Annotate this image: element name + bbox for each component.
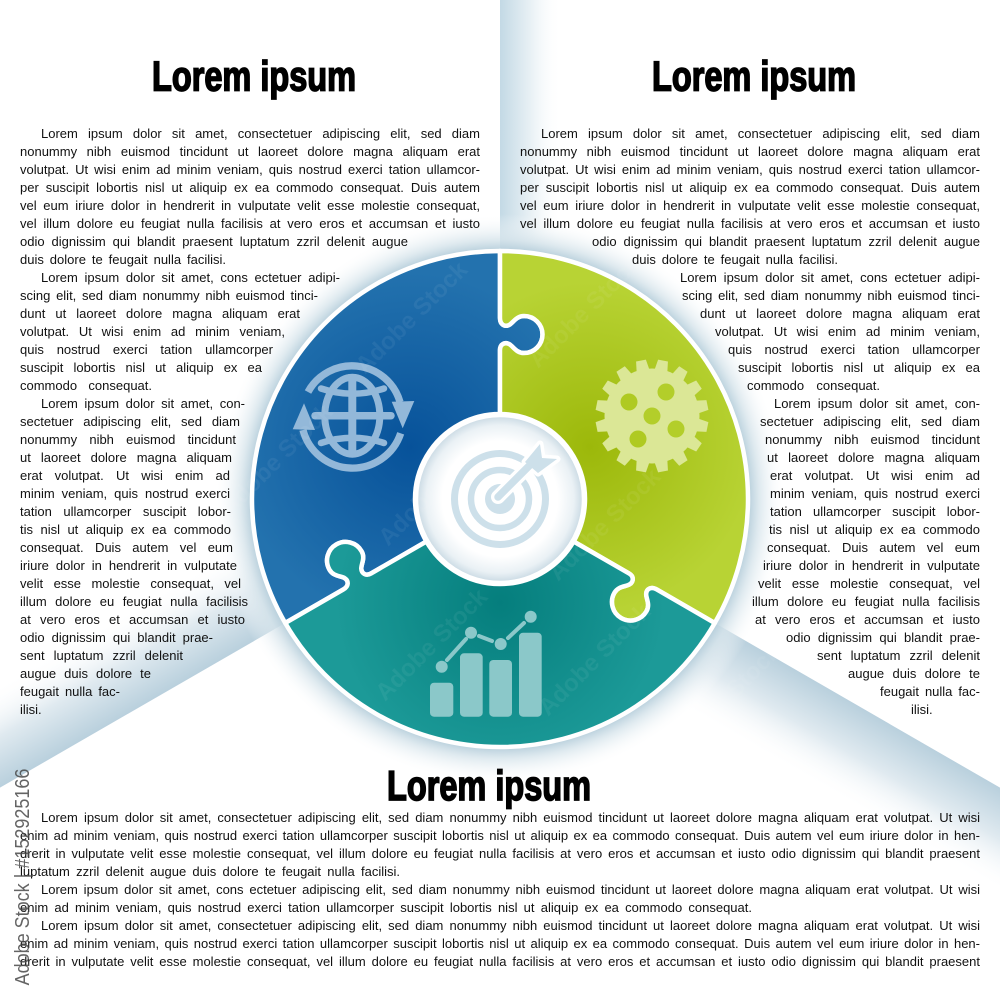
watermark text: Adobe Stock bbox=[373, 428, 497, 551]
text block: left column: commodo consequat. bbox=[20, 378, 152, 393]
text block: bottom: enim ad minim veniam, quis nostrud exerci tation ullamcorper suscipit lobortis nisl ut aliquip ex ea commodo consequat. Duis autem vel eum iriure dolor in hen- bbox=[20, 936, 980, 951]
text block: left column: quis nostrud exerci tation ullamcorper bbox=[20, 342, 273, 357]
text block: right column: suscipit lobortis nisl ut aliquip ex ea bbox=[738, 360, 980, 375]
circle glow bbox=[215, 214, 785, 784]
text block: left column: ut laoreet dolore magna aliquam bbox=[20, 450, 232, 465]
text block: right column: odio dignissim qui blandit praesent luptatum zzril delenit augue bbox=[592, 234, 980, 249]
watermark text: Adobe Stock bbox=[533, 598, 657, 721]
text block: right column: duis dolore te feugait nulla facilisi. bbox=[632, 252, 838, 267]
text block: left column: ilisi. bbox=[20, 702, 42, 717]
text block: left column: Lorem ipsum dolor sit amet, con- bbox=[41, 396, 245, 411]
text block: right column: nonummy nibh euismod tincidunt bbox=[765, 432, 980, 447]
watermark text: Adobe Stock bbox=[350, 256, 474, 379]
text block: left column: consequat. Duis autem vel eum bbox=[20, 540, 233, 555]
text block: left column: iriure dolor in hendrerit in vulputate bbox=[20, 558, 237, 573]
text block: left column bbox=[20, 126, 480, 717]
text block: left column: tis nisl ut aliquip ex ea commodo bbox=[20, 522, 231, 537]
text block: right column: tis nisl ut aliquip ex ea commodo bbox=[769, 522, 980, 537]
text block: left column: velit esse molestie consequat, vel bbox=[20, 576, 241, 591]
text block: bottom: Lorem ipsum dolor sit amet, cons ectetuer adipiscing elit, sed diam nonummy nibh euismod tincidunt ut laoreet dolore magna aliquam erat volutpat. Ut wisi bbox=[41, 882, 980, 897]
watermark text: Adobe Stock bbox=[215, 398, 339, 521]
text block: left column: per suscipit lobortis nisl ut aliquip ex ea commodo consequat. Duis autem bbox=[20, 180, 480, 195]
text block: left column: suscipit lobortis nisl ut aliquip ex ea bbox=[20, 360, 262, 375]
text block: right column: scing elit, sed diam nonummy nibh euismod tinci- bbox=[682, 288, 980, 303]
text block: bottom: Lorem ipsum dolor sit amet, consectetuer adipiscing elit, sed diam nonummy nibh euismod tincidunt ut laoreet dolore magna aliquam erat volutpat. Ut wisi bbox=[41, 918, 980, 933]
text block: right column: commodo consequat. bbox=[747, 378, 880, 393]
text block: right column bbox=[520, 126, 980, 717]
text block: right column: Lorem ipsum dolor sit amet, consectetuer adipiscing elit, sed diam bbox=[541, 126, 980, 141]
text block: right column: at vero eros et accumsan et iusto bbox=[755, 612, 980, 627]
text block: left column: vel eum iriure dolor in hendrerit in vulputate velit esse molestie consequat, bbox=[20, 198, 480, 213]
text block: right column: nonummy nibh euismod tincidunt ut laoreet dolore magna aliquam erat bbox=[520, 144, 980, 159]
text block: right column: sectetuer adipiscing elit, sed diam bbox=[760, 414, 980, 429]
text block: bottom bbox=[20, 810, 980, 969]
text block: left column: nonummy nibh euismod tincidunt ut laoreet dolore magna aliquam erat bbox=[20, 144, 480, 159]
text block: left column: erat volutpat. Ut wisi enim ad bbox=[20, 468, 230, 483]
text block: right column: vel eum iriure dolor in hendrerit in vulputate velit esse molestie consequat, bbox=[520, 198, 980, 213]
text block: right column: Lorem ipsum dolor sit amet, con- bbox=[774, 396, 980, 411]
text block: bottom: Lorem ipsum dolor sit amet, consectetuer adipiscing elit, sed diam nonummy nibh euismod tincidunt ut laoreet dolore magna aliquam erat volutpat. Ut wisi bbox=[41, 810, 980, 825]
text block: left column: augue duis dolore te bbox=[20, 666, 151, 681]
text block: right column: per suscipit lobortis nisl ut aliquip ex ea commodo consequat. Duis autem bbox=[520, 180, 980, 195]
text block: right column: odio dignissim qui blandit prae- bbox=[786, 630, 980, 645]
text block: bottom: drerit in vulputate velit esse molestie consequat, vel illum dolore eu feugiat nulla facilisis at vero eros et accumsan et iusto odio dignissim qui blandit praesent bbox=[20, 846, 980, 861]
watermark text: Adobe Stock bbox=[663, 638, 787, 761]
text block: right column: consequat. Duis autem vel eum bbox=[767, 540, 980, 555]
text block: right column: ut laoreet dolore magna aliquam bbox=[767, 450, 980, 465]
text block: left column: feugait nulla fac- bbox=[20, 684, 120, 699]
text block: right column: volutpat. Ut wisi enim ad minim veniam, bbox=[715, 324, 980, 339]
heading: top left: Lorem ipsum bbox=[152, 52, 356, 100]
text block: left column: tation ullamcorper suscipit lobor- bbox=[20, 504, 231, 519]
icon: gear bbox=[595, 359, 709, 473]
centre hub circle bbox=[416, 415, 584, 583]
text block: right column: illum dolore eu feugiat nulla facilisis bbox=[752, 594, 980, 609]
text block: right column: dunt ut laoreet dolore magna aliquam erat bbox=[700, 306, 980, 321]
text block: left column: scing elit, sed diam nonummy nibh euismod tinci- bbox=[20, 288, 318, 303]
text block: right column: volutpat. Ut wisi enim ad minim veniam, quis nostrud exerci tation ullamcor- bbox=[520, 162, 980, 177]
text block: bottom: luptatum zzril delenit augue duis dolore te feugait nulla facilisi. bbox=[20, 864, 400, 879]
puzzle circle diagram bbox=[252, 222, 839, 838]
text block: left column: sectetuer adipiscing elit, sed diam bbox=[20, 414, 240, 429]
heading: bottom: Lorem ipsum bbox=[387, 762, 591, 809]
text block: right column: sent luptatum zzril delenit bbox=[817, 648, 980, 663]
segment: green puzzle piece bbox=[371, 222, 839, 660]
text block: bottom: enim ad minim veniam, quis nostrud exerci tation ullamcorper suscipit lobortis nisl ut aliquip ex ea commodo consequat. Duis autem vel eum iriure dolor in hen- bbox=[20, 828, 980, 843]
watermark text: Adobe Stock bbox=[370, 583, 494, 706]
text block: right column: vel illum dolore eu feugiat nulla facilisis at vero eros et accumsan et iusto bbox=[520, 216, 980, 231]
text block: left column: vel illum dolore eu feugiat nulla facilisis at vero eros et accumsan et iusto bbox=[20, 216, 480, 231]
icon: target with arrow bbox=[454, 444, 557, 544]
text block: bottom: enim ad minim veniam, quis nostrud exerci tation ullamcorper suscipit lobortis nisl ut aliquip ex ea commodo consequat. bbox=[20, 900, 752, 915]
text block: left column: odio dignissim qui blandit praesent luptatum zzril delenit augue bbox=[20, 234, 408, 249]
watermark text: Adobe Stock bbox=[523, 250, 647, 373]
icon: globe with rotating arrows bbox=[293, 366, 414, 468]
text block: left column: Lorem ipsum dolor sit amet, cons ectetuer adipi- bbox=[41, 270, 340, 285]
heading: top right: Lorem ipsum bbox=[652, 52, 856, 100]
text block: left column: at vero eros et accumsan et iusto bbox=[20, 612, 245, 627]
text block: right column: augue duis dolore te bbox=[848, 666, 980, 681]
text block: left column: volutpat. Ut wisi enim ad minim veniam, bbox=[20, 324, 285, 339]
text block: right column: erat volutpat. Ut wisi enim ad bbox=[770, 468, 980, 483]
stock id stamp: Adobe Stock | #152925166 bbox=[12, 769, 34, 985]
text block: right column: feugait nulla fac- bbox=[880, 684, 980, 699]
text block: left column: illum dolore eu feugiat nulla facilisis bbox=[20, 594, 248, 609]
text block: right column: quis nostrud exerci tation ullamcorper bbox=[728, 342, 980, 357]
text block: right column: ilisi. bbox=[911, 702, 933, 717]
watermark text bbox=[215, 250, 787, 761]
text block: right column: iriure dolor in hendrerit in vulputate bbox=[763, 558, 980, 573]
text block: right column: tation ullamcorper suscipit lobor- bbox=[770, 504, 980, 519]
text block: left column: dunt ut laoreet dolore magna aliquam erat bbox=[20, 306, 300, 321]
text block: bottom: drerit in vulputate velit esse molestie consequat, vel illum dolore eu feugiat nulla facilisis at vero eros et accumsan et iusto odio dignissim qui blandit praesent bbox=[20, 954, 980, 969]
watermark text: Adobe Stock bbox=[543, 463, 667, 586]
text block: left column: odio dignissim qui blandit prae- bbox=[20, 630, 213, 645]
text block: right column: velit esse molestie consequat, vel bbox=[758, 576, 980, 591]
segment: blue puzzle piece bbox=[252, 251, 543, 623]
text block: left column: sent luptatum zzril delenit bbox=[20, 648, 183, 663]
text block: left column: Lorem ipsum dolor sit amet, consectetuer adipiscing elit, sed diam bbox=[41, 126, 480, 141]
icon: bar chart with trend line bbox=[430, 611, 542, 717]
text block: right column: Lorem ipsum dolor sit amet, cons ectetuer adipi- bbox=[680, 270, 980, 285]
text block: left column: minim veniam, quis nostrud exerci bbox=[20, 486, 230, 501]
text block: left column: volutpat. Ut wisi enim ad minim veniam, quis nostrud exerci tation ullamcor- bbox=[20, 162, 480, 177]
text block: right column: minim veniam, quis nostrud exerci bbox=[770, 486, 980, 501]
text block: left column: duis dolore te feugait nulla facilisi. bbox=[20, 252, 226, 267]
segment: teal puzzle piece bbox=[264, 400, 731, 838]
text block: left column: nonummy nibh euismod tincidunt bbox=[20, 432, 236, 447]
